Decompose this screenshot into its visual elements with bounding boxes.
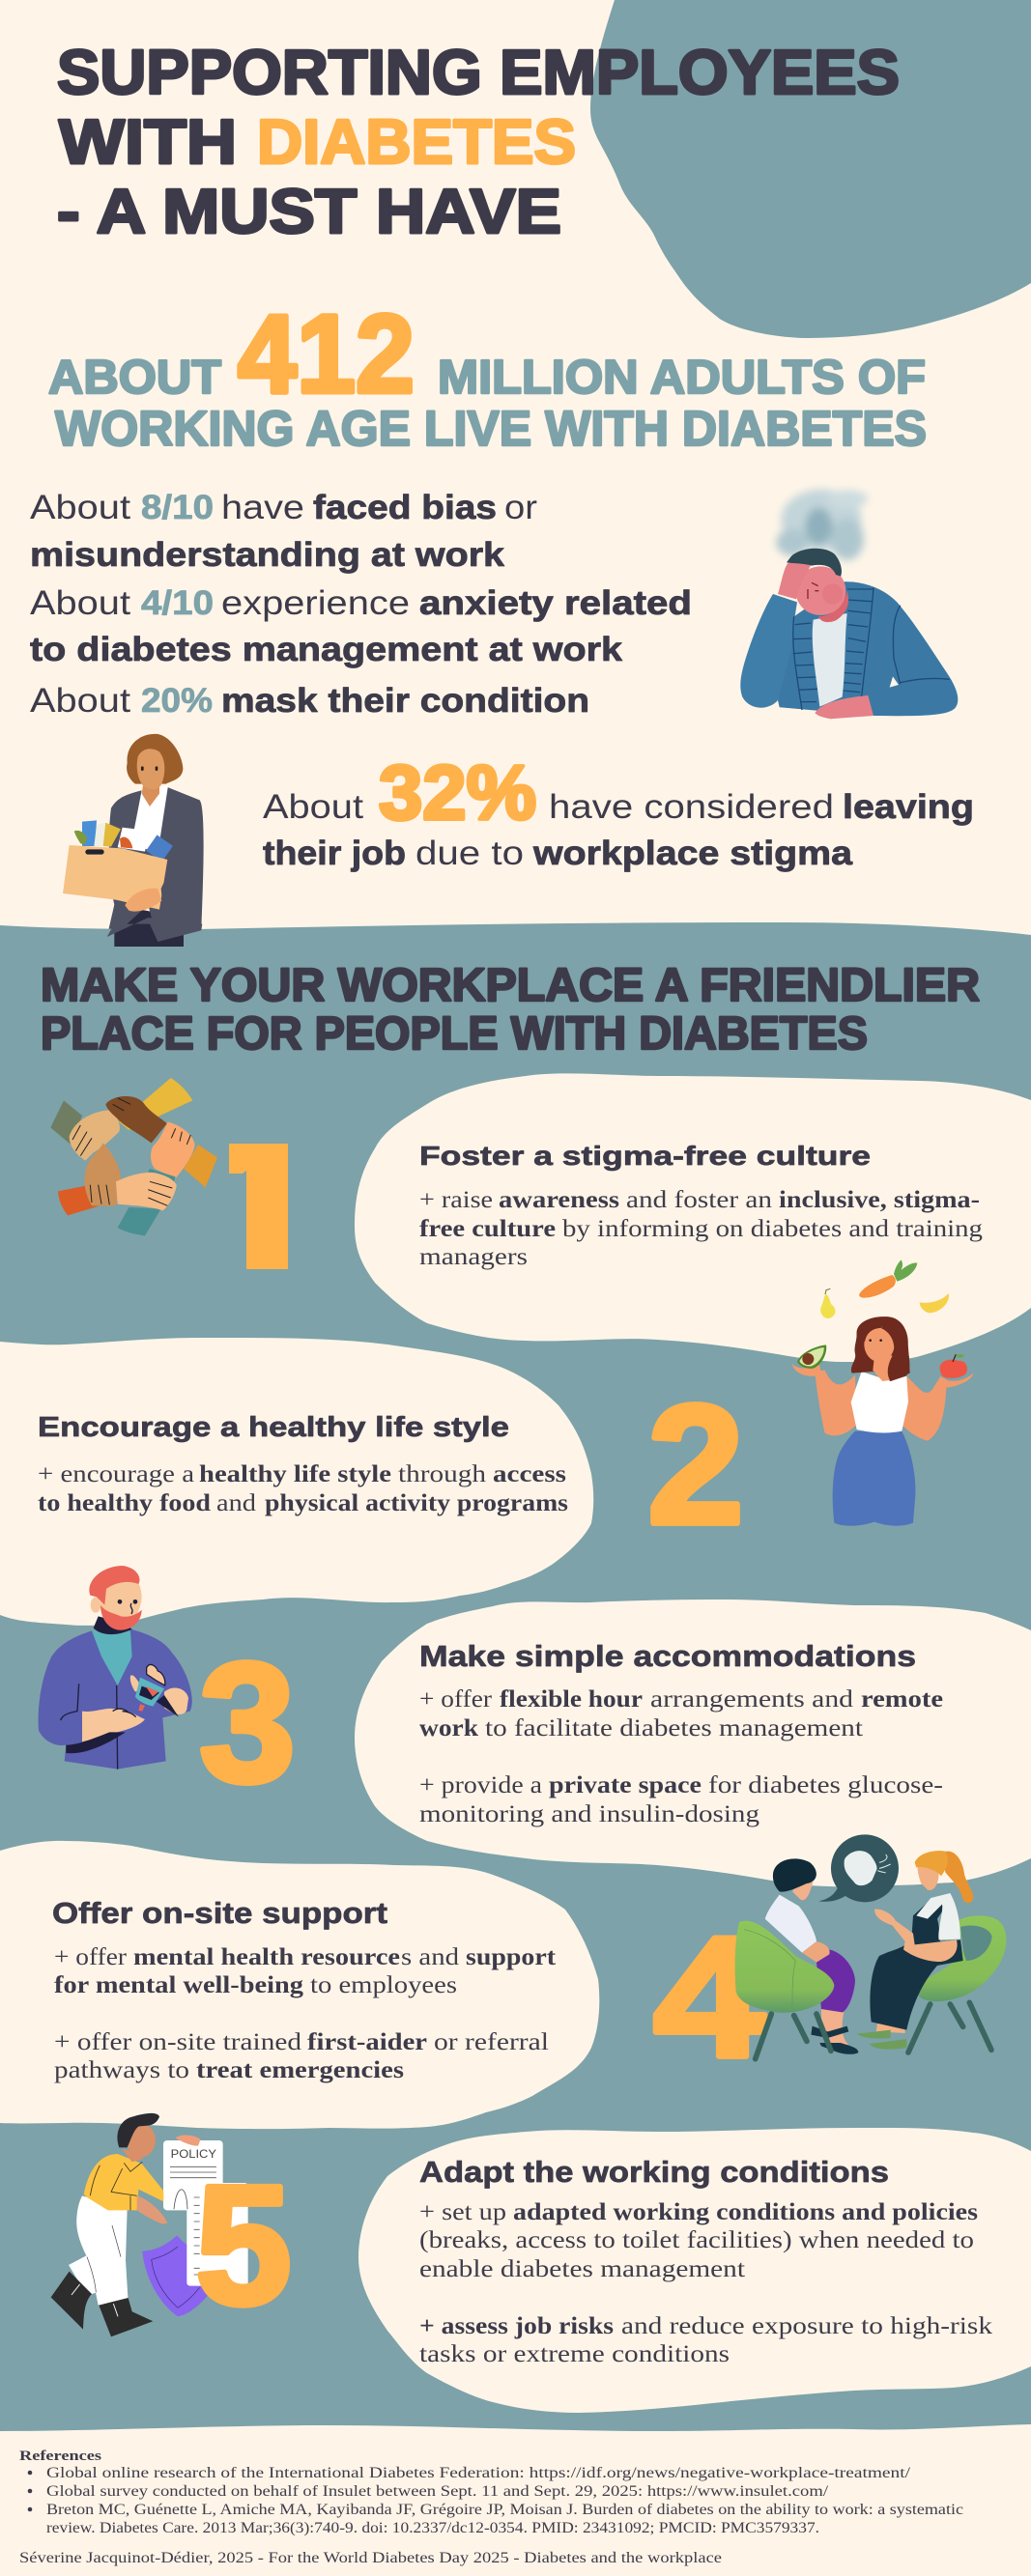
panel: step 5 adapt the working conditions [358, 2128, 1031, 2413]
statistics list: About [30, 682, 130, 720]
panel: step 5 adapt the working conditions: + set up [419, 2199, 506, 2225]
statistics list [30, 489, 692, 720]
headline statistic: 412 million adults: ABOUT [48, 352, 221, 404]
panel: step 4 offer on-site support: or referral [434, 2029, 549, 2055]
statistics list: mask their condition [221, 682, 589, 720]
title: DIABETES [257, 106, 576, 177]
illustration: woman carrying cardboard box [63, 734, 204, 947]
panel: step 3 make simple accommodations: remote [861, 1686, 943, 1713]
section heading: MAKE YOUR WORKPLACE A FRIENDLIER [41, 960, 980, 1011]
panel: step 2 encourage a healthy life style: through [398, 1461, 487, 1487]
illustration: two people talking in green chairs [735, 1834, 1006, 2059]
panel: step 1 foster a stigma-free culture: inclusive, stigma- [779, 1187, 980, 1213]
statistic: 32% considered leaving: workplace stigma [532, 835, 853, 872]
panel: step 1 foster a stigma-free culture: managers [419, 1244, 528, 1270]
statistic: 32% considered leaving: due to [415, 835, 524, 872]
panel: step 5 adapt the working conditions: tasks or extreme conditions [419, 2341, 730, 2367]
panel: step 1 foster a stigma-free culture: + raise [419, 1187, 493, 1213]
panel: step 4 offer on-site support [0, 1841, 599, 2129]
title: SUPPORTING EMPLOYEES [57, 37, 900, 107]
statistics list: About [30, 489, 130, 526]
panel: step 5 adapt the working conditions: enable diabetes management [419, 2256, 745, 2282]
statistics list: or [504, 489, 537, 526]
title: - A MUST HAVE [57, 176, 561, 246]
statistics list: 20% [141, 682, 213, 720]
panel: step 2 encourage a healthy life style: + encourage a [38, 1461, 194, 1487]
panel: step 4 offer on-site support: for mental well-being [54, 1972, 304, 1998]
panel: step 5 adapt the working conditions: and reduce exposure to high-risk [621, 2313, 993, 2339]
number 1 [229, 1144, 288, 1269]
number 3: 3 [199, 1628, 296, 1818]
panel: step 3 make simple accommodations: Make simple accommodations [419, 1639, 916, 1673]
panel: step 3 make simple accommodations [355, 1599, 1031, 1886]
panel: step 4 offer on-site support: s and [401, 1944, 460, 1970]
panel: step 2 encourage a healthy life style: access [493, 1461, 566, 1487]
number 5: 5 [195, 2151, 292, 2340]
illustration: person presenting policy document [51, 2113, 248, 2336]
statistic: 32% considered leaving: leaving [843, 788, 974, 826]
panel: step 2 encourage a healthy life style: physical activity programs [265, 1490, 568, 1516]
panel: step 1 foster a stigma-free culture [355, 1073, 1031, 1362]
references: References [19, 2449, 101, 2464]
illustration: worried man with smoke [740, 490, 958, 719]
panel: step 3 make simple accommodations: for diabetes glucose- [708, 1772, 943, 1798]
statistics list: 8/10 [141, 489, 214, 526]
panel: step 4 offer on-site support: to employees [310, 1972, 457, 1998]
panel: step 1 foster a stigma-free culture: and foster an [626, 1187, 773, 1213]
panel: step 1 foster a stigma-free culture: Foster a stigma-free culture [419, 1141, 871, 1171]
statistics list: experience [221, 584, 410, 622]
panel: step 3 make simple accommodations: + provide a [419, 1772, 542, 1798]
teal action section background [0, 922, 1031, 2431]
statistic: 32% considered leaving [263, 750, 974, 872]
panel: step 4 offer on-site support: Offer on-site support [52, 1896, 387, 1930]
panel: step 4 offer on-site support: support [466, 1944, 557, 1970]
panel: step 3 make simple accommodations: monitoring and insulin-dosing [419, 1801, 760, 1827]
statistics list: About [30, 584, 130, 622]
panel: step 5 adapt the working conditions: + assess job risks [419, 2313, 614, 2339]
woman legs over teal band [107, 918, 202, 947]
statistics list: misunderstanding at work [30, 536, 505, 574]
panel: step 4 offer on-site support: + offer on-site trained [54, 2029, 302, 2055]
panel: step 3 make simple accommodations: private space [549, 1772, 702, 1798]
panel: step 5 adapt the working conditions: Adapt the working conditions [419, 2155, 889, 2189]
panel: step 4 offer on-site support: pathways to [54, 2057, 189, 2083]
panel: step 2 encourage a healthy life style: to healthy food [38, 1490, 211, 1516]
panel: step 5 adapt the working conditions: (breaks, access to toilet facilities) when needed to [419, 2227, 974, 2253]
statistics list: to diabetes management at work [30, 631, 623, 668]
statistic: 32% considered leaving: have considered [549, 788, 834, 826]
references: Breton MC, Guénette L, Amiche MA, Kayibanda JF, Grégoire JP, Moisan J. Burden of diabetes on the ability to work: a systematic [46, 2502, 963, 2518]
statistics list: 4/10 [141, 584, 214, 622]
number 1: 1 [213, 1108, 301, 1308]
author credit: Séverine Jacquinot-Dédier, 2025 - For the World Diabetes Day 2025 - Diabetes and the workplace [19, 2550, 722, 2566]
panel: step 3 make simple accommodations: + offer [419, 1686, 493, 1713]
panel: step 4 offer on-site support: + offer [54, 1944, 128, 1970]
headline statistic: 412 million adults [48, 293, 927, 456]
statistics list: have [221, 489, 304, 526]
statistic: 32% considered leaving: their job [263, 835, 406, 872]
panel: step 1 foster a stigma-free culture: by informing on diabetes and training [562, 1216, 984, 1242]
references [19, 2449, 963, 2536]
illustration: woman with healthy food [791, 1260, 973, 1526]
illustration: man checking blood glucose [39, 1566, 192, 1769]
references: review. Diabetes Care. 2013 Mar;36(3):740-9. doi: 10.2337/dc12-0354. PMID: 23431092; PMCID: PMC3579337. [46, 2520, 819, 2536]
headline statistic: 412 million adults: WORKING AGE LIVE WITH DIABETES [55, 401, 927, 456]
section heading: PLACE FOR PEOPLE WITH DIABETES [41, 1008, 868, 1060]
panel: step 2 encourage a healthy life style: Encourage a healthy life style [38, 1412, 509, 1443]
statistic: 32% considered leaving: 32% [379, 750, 536, 835]
panel: step 4 offer on-site support: first-aider [307, 2029, 427, 2055]
statistics list: anxiety related [419, 584, 692, 622]
panel: step 2 encourage a healthy life style [0, 1338, 593, 1626]
panel: step 2 encourage a healthy life style: and [216, 1490, 257, 1516]
panel: step 2 encourage a healthy life style: healthy life style [199, 1461, 391, 1487]
number 4: 4 [653, 1901, 765, 2093]
title: WITH [59, 106, 237, 177]
panel: step 1 foster a stigma-free culture: awareness [499, 1187, 619, 1213]
number 2: 2 [647, 1371, 744, 1560]
panel: step 4 offer on-site support: treat emergencies [196, 2057, 404, 2083]
panel: step 3 make simple accommodations: work [419, 1715, 478, 1741]
panel: step 3 make simple accommodations: arrangements and [650, 1686, 854, 1713]
statistic: 32% considered leaving: About [263, 788, 363, 826]
panel: step 4 offer on-site support: mental health resource [133, 1944, 400, 1970]
panel: step 3 make simple accommodations: to facilitate diabetes management [485, 1715, 863, 1741]
top right teal blob [590, 0, 1031, 338]
references: Global online research of the International Diabetes Federation: https://idf.org/news/negative-workplace-treatment/ [46, 2465, 911, 2481]
panel: step 5 adapt the working conditions: adapted working conditions and policies [513, 2199, 978, 2225]
illustration: hands in a circle [50, 1078, 217, 1235]
title [57, 37, 900, 246]
headline statistic: 412 million adults: 412 [238, 293, 415, 416]
document label: POLICY [171, 2147, 216, 2161]
statistics list: faced bias [313, 489, 497, 526]
references: Global survey conducted on behalf of Insulet between Sept. 11 and Sept. 29, 2025: https://www.insulet.com/ [46, 2483, 829, 2500]
panel: step 1 foster a stigma-free culture: free culture [419, 1216, 556, 1242]
headline statistic: 412 million adults: MILLION ADULTS OF [438, 352, 926, 404]
section heading [41, 960, 980, 1060]
panel: step 3 make simple accommodations: flexible hour [500, 1686, 643, 1713]
